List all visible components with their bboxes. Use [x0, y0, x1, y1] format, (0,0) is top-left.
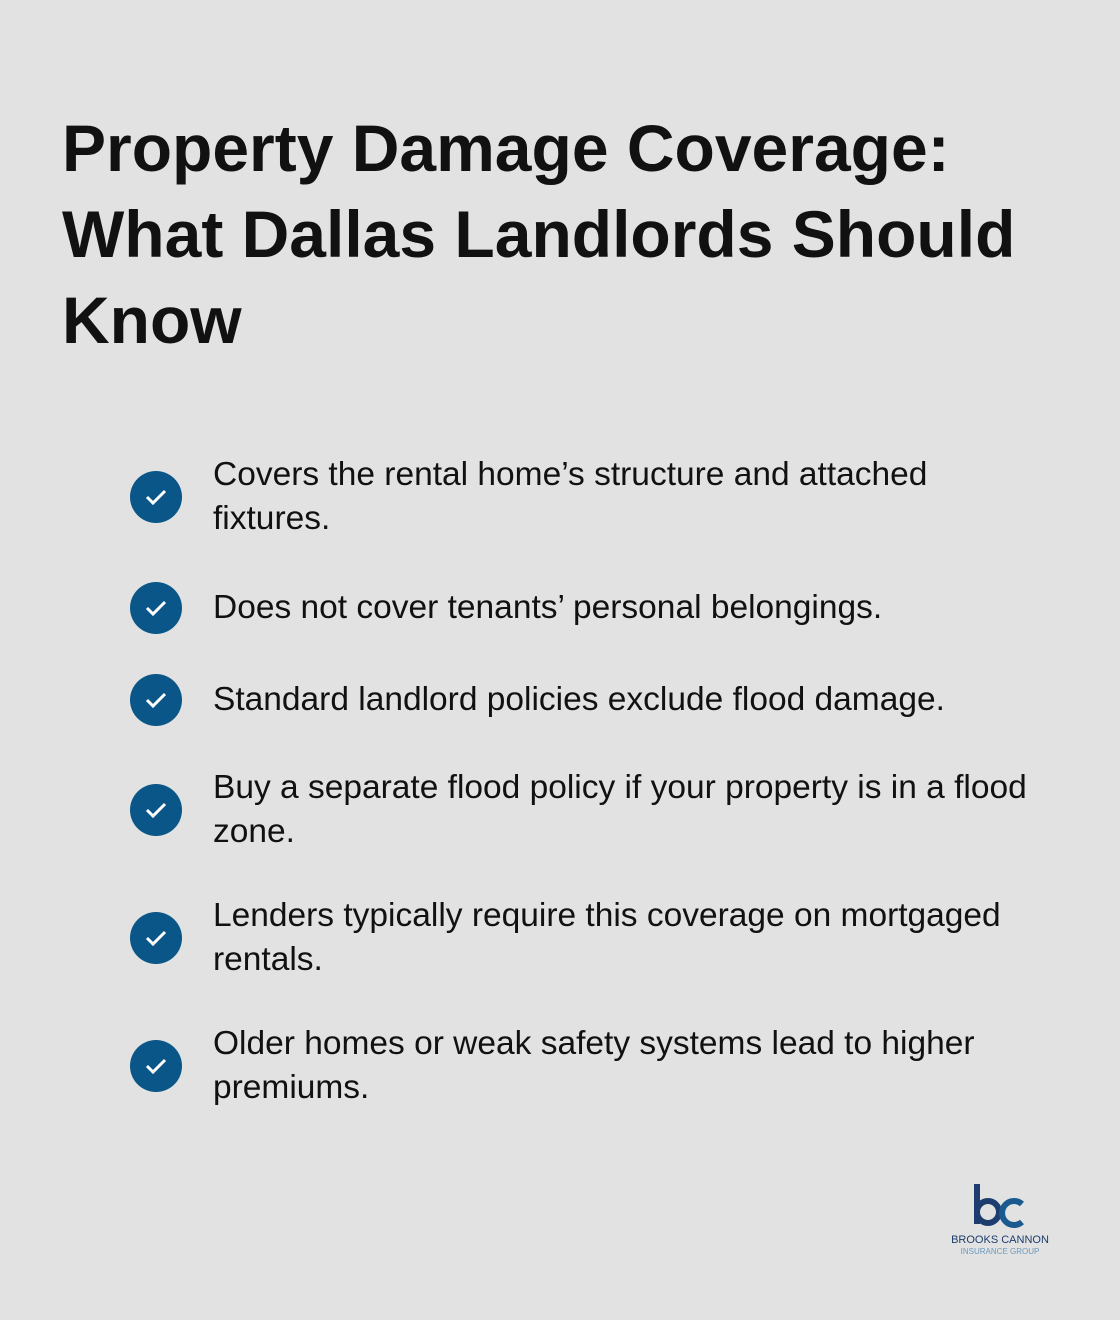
item 2: Does not cover tenants’ personal belongings.: [213, 589, 882, 626]
item 5: Lenders typically require this coverage on mortgaged: [213, 897, 1001, 934]
item 1: [130, 456, 927, 537]
title: [62, 111, 1015, 357]
logo: [951, 1184, 1049, 1256]
item 6: premiums.: [213, 1069, 369, 1106]
title: What Dallas Landlords Should: [62, 197, 1015, 271]
title: Know: [62, 283, 242, 357]
item 3: Standard landlord policies exclude flood damage.: [213, 681, 945, 718]
logo: INSURANCE GROUP: [961, 1247, 1039, 1256]
item 1: fixtures.: [213, 500, 330, 537]
item 5: rentals.: [213, 941, 323, 978]
item 1: Covers the rental home’s structure and attached: [213, 456, 927, 493]
item 6: Older homes or weak safety systems lead to higher: [213, 1025, 975, 1062]
item 4: [130, 769, 1027, 850]
title: Property Damage Coverage:: [62, 111, 950, 185]
item 4: Buy a separate flood policy if your property is in a flood: [213, 769, 1027, 806]
item 5: [130, 897, 1001, 978]
item 6: [130, 1025, 975, 1106]
item 4: zone.: [213, 813, 295, 850]
item 3: [130, 674, 945, 726]
logo: BROOKS CANNON: [951, 1234, 1049, 1246]
item 2: [130, 582, 882, 634]
